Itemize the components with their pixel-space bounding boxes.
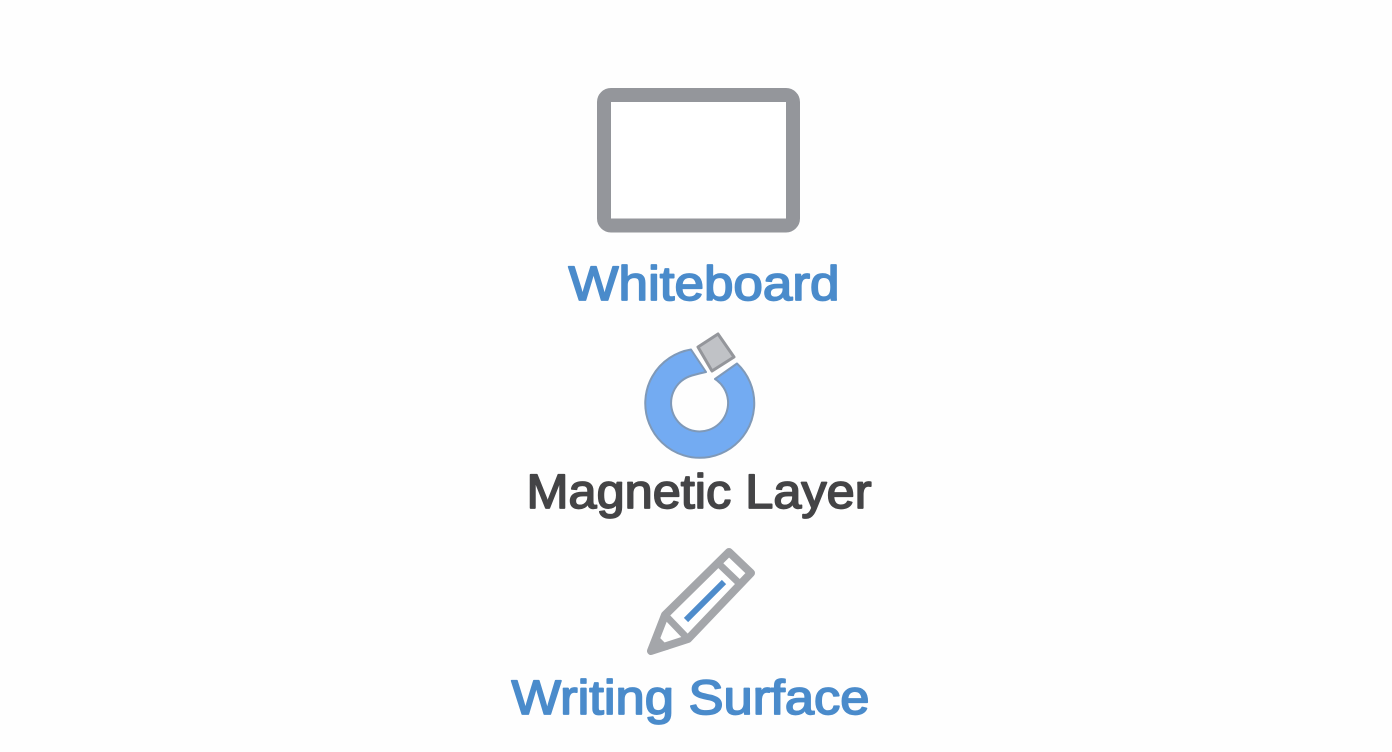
label: Writing Surface: Writing Surface	[512, 672, 870, 725]
icon: magnet ring with gray keeper	[645, 334, 754, 458]
icon: pencil	[650, 552, 751, 653]
icon: whiteboard frame	[604, 95, 793, 226]
label: Whiteboard: Whiteboard	[568, 258, 840, 311]
label: Magnetic Layer: Magnetic Layer	[526, 466, 872, 519]
